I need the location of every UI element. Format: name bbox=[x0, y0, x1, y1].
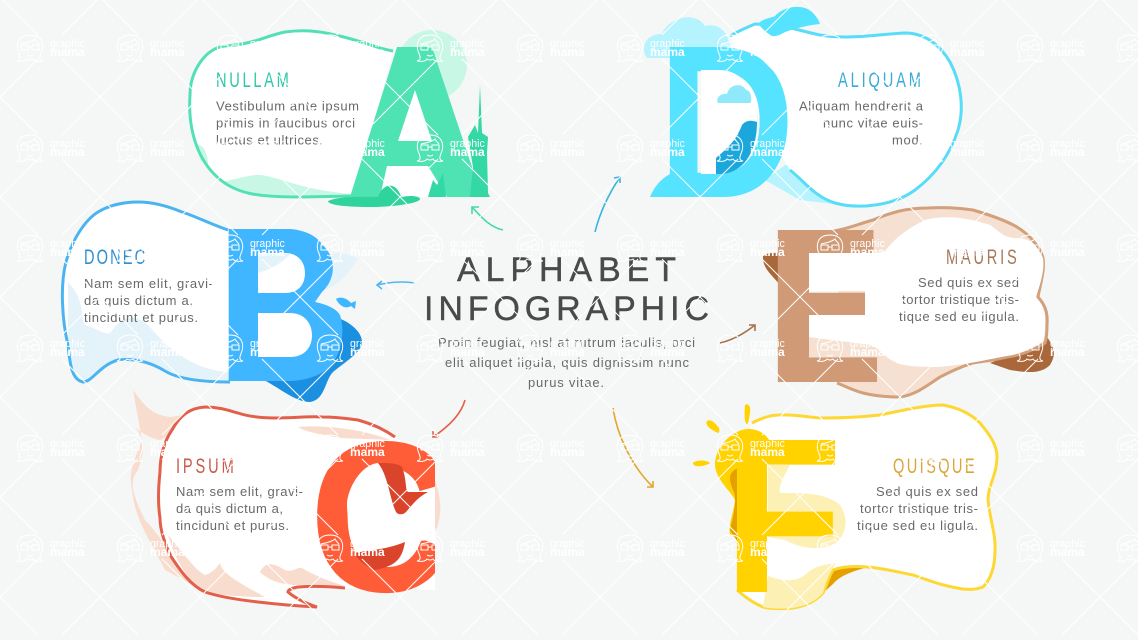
body text: tortor tristique tris- bbox=[902, 292, 1019, 307]
hills bbox=[197, 144, 352, 197]
watermark overlay: graphic bbox=[850, 138, 885, 150]
watermark overlay: mama bbox=[950, 245, 985, 259]
watermark overlay: mama bbox=[750, 345, 785, 359]
title bbox=[424, 251, 709, 328]
card white fill bbox=[737, 405, 997, 609]
watermark overlay: graphic bbox=[350, 238, 385, 250]
heading: QUISQUE bbox=[893, 453, 975, 478]
body text bbox=[857, 484, 978, 533]
card white fill bbox=[730, 24, 961, 206]
puddle and mound bbox=[328, 186, 420, 207]
watermark overlay: mama bbox=[750, 145, 785, 159]
watermark overlay: graphic bbox=[550, 138, 585, 150]
watermark overlay: mama bbox=[750, 245, 785, 259]
watermark overlay: graphic bbox=[150, 138, 185, 150]
watermark overlay: mama bbox=[950, 345, 985, 359]
card tint fill bbox=[827, 208, 1047, 397]
card white fill bbox=[190, 31, 393, 197]
cloud left bbox=[644, 17, 730, 58]
body text: Sed quis ex sed bbox=[918, 275, 1019, 290]
watermark overlay: graphic bbox=[1050, 438, 1085, 450]
watermark overlay: mama bbox=[650, 445, 685, 459]
watermark overlay: graphic bbox=[50, 438, 85, 450]
watermark overlay: mama bbox=[550, 245, 585, 259]
B counters bbox=[258, 253, 312, 357]
watermark overlay: mama bbox=[750, 545, 785, 559]
intro text: Proin feugiat, nisl at rutrum iaculis, orci bbox=[438, 335, 695, 350]
flame tint interior bbox=[168, 426, 390, 597]
watermark overlay: graphic bbox=[350, 338, 385, 350]
watermark overlay: mama bbox=[450, 145, 485, 159]
body text: da quis dictum a, bbox=[176, 501, 283, 516]
panel: A card bbox=[190, 1, 490, 241]
watermark overlay: mama bbox=[1050, 245, 1085, 259]
card outline bbox=[827, 208, 1047, 397]
watermark overlay: mama bbox=[350, 445, 385, 459]
watermark overlay: graphic bbox=[650, 438, 685, 450]
watermark overlay: graphic bbox=[950, 138, 985, 150]
blue blob bbox=[229, 229, 342, 381]
watermark overlay: graphic bbox=[450, 538, 485, 550]
watermark overlay: mama bbox=[1050, 45, 1085, 59]
sun circle bbox=[715, 429, 770, 540]
water tint bbox=[68, 282, 229, 381]
watermark overlay: mama bbox=[350, 45, 385, 59]
watermark overlay: graphic bbox=[350, 138, 385, 150]
panel: D card bbox=[644, 0, 961, 244]
letter E: E bbox=[766, 183, 884, 429]
watermark overlay: graphic bbox=[50, 538, 85, 550]
watermark overlay: graphic bbox=[250, 538, 285, 550]
intro text: elit aliquet ligula, quis dignissim nunc bbox=[445, 355, 690, 370]
arrow: to D bbox=[595, 177, 620, 232]
watermark overlay: graphic bbox=[750, 138, 785, 150]
watermark overlay: mama bbox=[150, 45, 185, 59]
E lower tint bbox=[809, 337, 870, 357]
watermark overlay: graphic bbox=[550, 338, 585, 350]
watermark overlay: mama bbox=[50, 545, 85, 559]
body text: tique sed eu ligula. bbox=[857, 518, 978, 533]
watermark overlay: mama bbox=[50, 445, 85, 459]
dark wave right bbox=[823, 566, 868, 593]
title: ALPHABET bbox=[457, 251, 676, 289]
arrow: to E bbox=[720, 325, 755, 343]
watermark overlay: graphic bbox=[450, 38, 485, 50]
watermark overlay: graphic bbox=[650, 338, 685, 350]
card outline bbox=[62, 202, 230, 382]
watermark overlay: mama bbox=[1050, 545, 1085, 559]
watermark overlay: graphic bbox=[650, 538, 685, 550]
watermark overlay: graphic bbox=[550, 38, 585, 50]
watermark overlay: graphic bbox=[50, 238, 85, 250]
heading: MAURIS bbox=[946, 244, 1017, 269]
watermark overlay: graphic bbox=[750, 238, 785, 250]
watermark overlay: mama bbox=[50, 245, 85, 259]
watermark overlay: mama bbox=[1050, 445, 1085, 459]
watermark overlay: mama bbox=[1050, 345, 1085, 359]
body text: luctus et ultrices. bbox=[216, 132, 323, 148]
watermark overlay: mama bbox=[150, 445, 185, 459]
watermark overlay: mama bbox=[550, 545, 585, 559]
watermark overlay: mama bbox=[50, 345, 85, 359]
dark splash left bbox=[763, 253, 780, 285]
watermark overlay: mama bbox=[650, 145, 685, 159]
watermark overlay: graphic bbox=[850, 438, 885, 450]
watermark overlay: mama bbox=[450, 545, 485, 559]
watermark overlay: mama bbox=[550, 145, 585, 159]
C inner shadow bbox=[354, 463, 428, 570]
watermark overlay: mama bbox=[1050, 145, 1085, 159]
watermark overlay: graphic bbox=[50, 38, 85, 50]
watermark overlay: mama bbox=[850, 445, 885, 459]
body text: tincidunt et purus. bbox=[84, 310, 198, 325]
watermark overlay: graphic bbox=[150, 438, 185, 450]
intro text: purus vitae. bbox=[528, 375, 604, 390]
card outline bbox=[158, 407, 395, 607]
watermark overlay: mama bbox=[50, 45, 85, 59]
title: INFOGRAPHIC bbox=[424, 290, 709, 328]
watermark overlay: graphic bbox=[350, 38, 385, 50]
body text: Sed quis ex sed bbox=[876, 484, 978, 499]
watermark overlay: mama bbox=[650, 245, 685, 259]
body text: primis in faucibus orci bbox=[216, 116, 355, 130]
watermark overlay: graphic bbox=[350, 438, 385, 450]
watermark overlay: graphic bbox=[950, 238, 985, 250]
watermark overlay: graphic bbox=[50, 138, 85, 150]
watermark overlay: graphic bbox=[150, 538, 185, 550]
letter A: A bbox=[350, 1, 482, 241]
watermark overlay: mama bbox=[650, 45, 685, 59]
body text: Nam sem elit, gravi- bbox=[84, 276, 213, 291]
body text: Aliquam hendrerit a bbox=[799, 98, 924, 114]
heading: IPSUM bbox=[176, 453, 234, 478]
body text bbox=[176, 484, 303, 533]
watermark overlay: mama bbox=[850, 145, 885, 159]
D counter bbox=[701, 70, 757, 174]
C white counter bbox=[347, 463, 435, 546]
watermark overlay: mama bbox=[750, 45, 785, 59]
watermark overlay: graphic bbox=[50, 338, 85, 350]
heading: NULLAM bbox=[216, 67, 289, 92]
arrow: to A bbox=[472, 207, 503, 230]
body text: nunc vitae euis- bbox=[823, 116, 923, 130]
watermark overlay: graphic bbox=[550, 538, 585, 550]
watermark overlay: graphic bbox=[750, 38, 785, 50]
watermark overlay: graphic bbox=[250, 238, 285, 250]
watermark overlay: graphic bbox=[850, 338, 885, 350]
base blob bbox=[650, 173, 700, 197]
sun rays bbox=[693, 404, 750, 466]
letter F: F bbox=[724, 393, 842, 640]
letter A mass bbox=[350, 47, 482, 197]
flame tint bbox=[131, 390, 205, 592]
letter B: B bbox=[217, 182, 343, 429]
watermark overlay: graphic bbox=[550, 438, 585, 450]
watermark overlay: mama bbox=[750, 445, 785, 459]
counter tint bbox=[258, 254, 290, 273]
watermark overlay: graphic bbox=[1050, 138, 1085, 150]
watermark overlay: mama bbox=[650, 345, 685, 359]
watermark overlay: graphic bbox=[850, 538, 885, 550]
bottom wave tint bbox=[765, 165, 860, 207]
watermark overlay: mama bbox=[850, 45, 885, 59]
watermark overlay: graphic bbox=[250, 438, 285, 450]
watermark overlay: mama bbox=[350, 345, 385, 359]
watermark overlay: graphic bbox=[1050, 538, 1085, 550]
body text bbox=[899, 275, 1019, 324]
A counter and opening bbox=[380, 90, 447, 197]
watermark overlay: mama bbox=[850, 545, 885, 559]
watermark overlay: graphic bbox=[950, 38, 985, 50]
watermark overlay: mama bbox=[950, 145, 985, 159]
sun circle bbox=[397, 30, 467, 100]
watermark overlay: graphic bbox=[750, 538, 785, 550]
watermark overlay: mama bbox=[850, 245, 885, 259]
watermark overlay: mama bbox=[450, 345, 485, 359]
card white fill bbox=[62, 202, 230, 382]
watermark overlay: mama bbox=[250, 245, 285, 259]
body text: Nam sem elit, gravi- bbox=[176, 484, 303, 499]
watermark overlay: mama bbox=[450, 445, 485, 459]
watermark overlay: mama bbox=[150, 345, 185, 359]
watermark overlay: graphic bbox=[950, 538, 985, 550]
body text bbox=[799, 98, 924, 148]
watermark overlay: graphic bbox=[650, 238, 685, 250]
dark wave bbox=[262, 318, 362, 402]
watermark overlay: graphic bbox=[1050, 238, 1085, 250]
watermark overlay: mama bbox=[650, 545, 685, 559]
counter hill bbox=[716, 121, 757, 174]
watermark overlay: mama bbox=[250, 145, 285, 159]
body text: tincidunt et purus. bbox=[176, 518, 289, 533]
top cloud bbox=[758, 7, 820, 36]
watermark overlay: graphic bbox=[150, 338, 185, 350]
right wave tint bbox=[325, 253, 358, 290]
watermark overlay: mama bbox=[950, 45, 985, 59]
arrow: to C bbox=[433, 400, 465, 437]
watermark overlay: graphic bbox=[650, 138, 685, 150]
card outline bbox=[190, 31, 393, 197]
watermark overlay: graphic bbox=[850, 238, 885, 250]
watermark overlay: mama bbox=[350, 145, 385, 159]
grass bbox=[428, 85, 490, 197]
watermark overlay: mama bbox=[150, 145, 185, 159]
heading: DONEC bbox=[84, 244, 145, 269]
watermark overlay: graphic bbox=[950, 338, 985, 350]
flame tint right bbox=[435, 480, 440, 530]
watermark overlay: mama bbox=[950, 445, 985, 459]
panel: B card bbox=[62, 182, 362, 429]
watermark overlay: graphic bbox=[250, 38, 285, 50]
fish bbox=[336, 298, 356, 309]
small cloud bbox=[717, 85, 751, 103]
dark splash right bbox=[990, 335, 1054, 372]
panel: C card bbox=[130, 390, 440, 608]
body text: tortor tristique tris- bbox=[860, 501, 978, 516]
watermark overlay: mama bbox=[250, 445, 285, 459]
watermark overlay: mama bbox=[950, 545, 985, 559]
watermark overlay: mama bbox=[850, 345, 885, 359]
body text: mod. bbox=[892, 132, 923, 148]
watermark overlay: graphic bbox=[950, 438, 985, 450]
card outline bbox=[737, 405, 997, 609]
watermark overlay: graphic bbox=[750, 438, 785, 450]
watermark overlay: graphic bbox=[450, 338, 485, 350]
intro text bbox=[438, 335, 695, 390]
watermark overlay: mama bbox=[550, 345, 585, 359]
white interior bbox=[809, 217, 1045, 367]
watermark overlay: graphic bbox=[450, 138, 485, 150]
card white fill bbox=[160, 407, 435, 607]
watermark overlay: mama bbox=[250, 345, 285, 359]
watermark overlay: mama bbox=[250, 45, 285, 59]
panel: F card bbox=[693, 393, 997, 640]
body text bbox=[84, 276, 213, 325]
watermark overlay: graphic bbox=[150, 238, 185, 250]
body text bbox=[216, 98, 359, 148]
panel: E card bbox=[763, 183, 1054, 429]
heading: ALIQUAM bbox=[838, 67, 921, 92]
watermark overlay: mama bbox=[450, 45, 485, 59]
watermark overlay: mama bbox=[550, 445, 585, 459]
watermark overlay: graphic bbox=[150, 38, 185, 50]
watermark overlay: mama bbox=[50, 145, 85, 159]
body text: Vestibulum ante ipsum bbox=[216, 98, 359, 114]
watermark overlay: graphic bbox=[550, 238, 585, 250]
arrow: to B bbox=[377, 281, 415, 289]
watermark overlay: graphic bbox=[650, 38, 685, 50]
arrow: to F bbox=[613, 408, 653, 487]
letter C: C bbox=[310, 399, 452, 636]
watermark overlay: graphic bbox=[450, 238, 485, 250]
sun shadow bbox=[730, 468, 738, 545]
letter D: D bbox=[657, 0, 796, 244]
card outline bbox=[730, 24, 961, 206]
body text: da quis dictum a, bbox=[84, 293, 193, 308]
watermark overlay: graphic bbox=[450, 438, 485, 450]
watermark overlay: mama bbox=[450, 245, 485, 259]
watermark overlay: graphic bbox=[850, 38, 885, 50]
watermark overlay: mama bbox=[150, 545, 185, 559]
watermark overlay: graphic bbox=[350, 538, 385, 550]
watermark overlay: mama bbox=[350, 545, 385, 559]
watermark overlay: mama bbox=[350, 245, 385, 259]
watermark overlay: mama bbox=[150, 245, 185, 259]
watermark overlay: mama bbox=[250, 545, 285, 559]
body text: tique sed eu ligula. bbox=[899, 309, 1019, 324]
watermark overlay: graphic bbox=[1050, 38, 1085, 50]
watermark overlay: graphic bbox=[1050, 338, 1085, 350]
letter tint bbox=[763, 465, 846, 609]
watermark overlay: graphic bbox=[250, 138, 285, 150]
watermark overlay: graphic bbox=[250, 338, 285, 350]
watermark overlay: graphic bbox=[750, 338, 785, 350]
watermark overlay: mama bbox=[550, 45, 585, 59]
